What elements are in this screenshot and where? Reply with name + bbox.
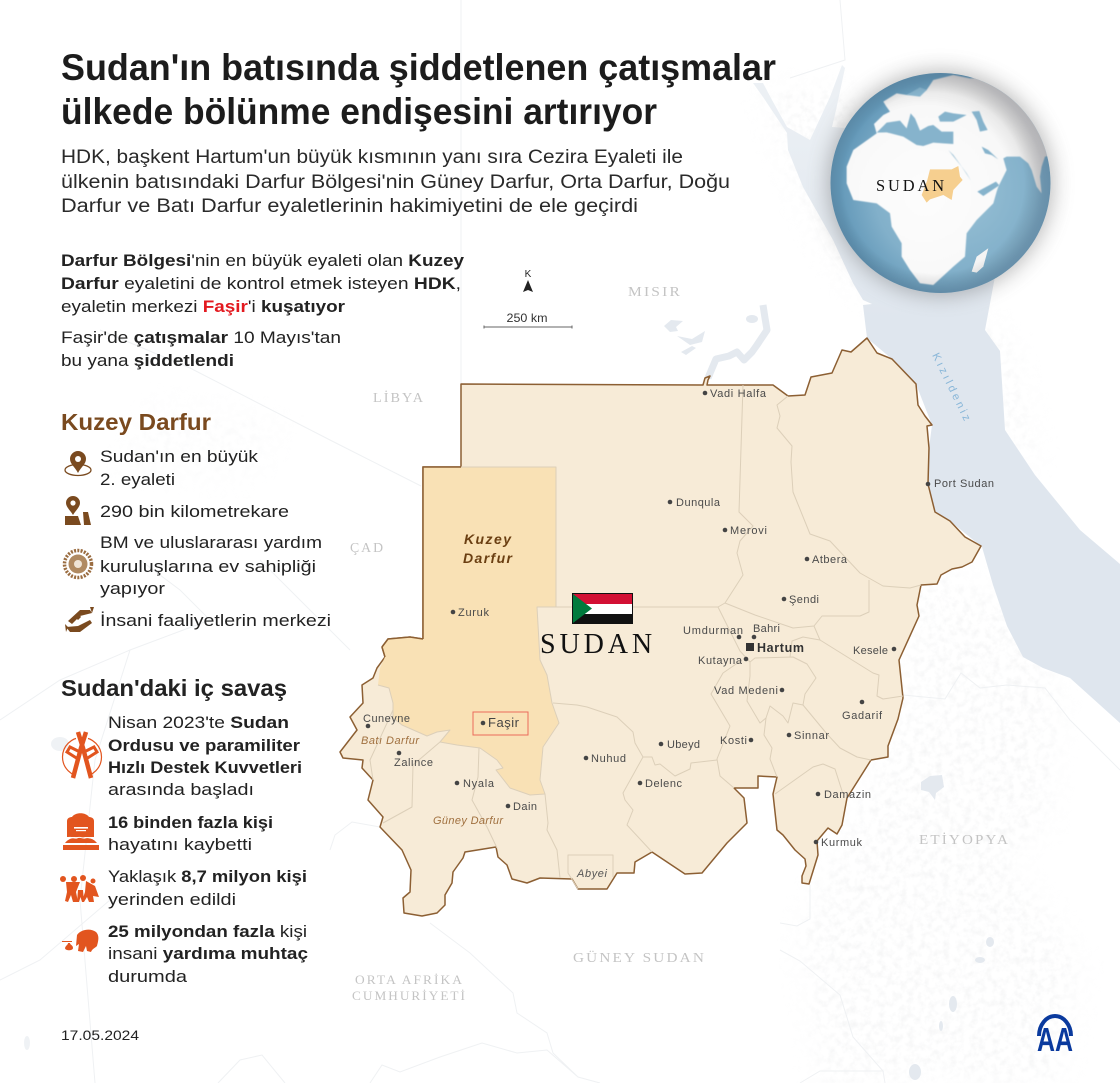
fact: UN host: kuruluşlarına ev sahipliği: [100, 557, 316, 576]
neighbouring country labels: MISIR: [628, 285, 682, 300]
city labels and markers: Hartum: [757, 641, 804, 655]
neighbouring country labels: [350, 285, 1010, 1003]
flag of Sudan: [572, 593, 633, 624]
icon: pin on ellipse: [65, 451, 91, 476]
fact: aid need: [108, 922, 308, 986]
fact: displaced: yerinden edildi: [108, 890, 236, 909]
city labels and markers: Dain: [513, 801, 537, 813]
icon: people in need: [62, 930, 98, 952]
north arrow and scale bar: K: [525, 269, 532, 280]
water: Lake Nasser and Toshka: [664, 305, 767, 378]
fact: displaced: [108, 867, 307, 909]
city labels and markers: Merovi: [730, 525, 767, 537]
state labels: Abyei: [576, 868, 608, 880]
title: [61, 47, 776, 132]
globe: Sudan highlight: [922, 166, 963, 203]
icon: crossed rifles: [62, 728, 102, 781]
city labels and markers: Kutayna: [698, 655, 743, 667]
water: Red Sea and Gulfs: [753, 65, 1120, 723]
fact: aid need: durumda: [108, 967, 188, 986]
globe: [825, 70, 1055, 300]
city labels and markers: Zuruk: [458, 607, 490, 619]
fact: start of war: Hızlı Destek Kuvvetleri: [108, 758, 302, 777]
globe land: [847, 72, 1053, 285]
city labels and markers: Vad Medeni: [714, 685, 778, 697]
city labels and markers: Nuhud: [591, 753, 626, 765]
fact: second largest: Sudan'ın en büyük: [100, 447, 259, 466]
title: ülkede bölünme endişesini artırıyor: [61, 91, 657, 132]
heading: Kuzey Darfur: Kuzey Darfur: [61, 409, 211, 435]
state labels: [361, 531, 608, 880]
neighbouring country labels: LİBYA: [373, 390, 425, 406]
state labels: Batı Darfur: [361, 735, 420, 747]
north arrow and scale bar: 250 km: [506, 311, 548, 325]
fact: aid need: 25 milyondan fazla kişi: [108, 922, 307, 941]
intro paragraph: eyaletin merkezi Faşir 'i kuşatıyor: [61, 297, 345, 316]
city labels and markers: Kesele: [853, 645, 888, 657]
city labels and markers: Dunqula: [676, 497, 721, 509]
fact: deaths: 16 binden fazla kişi: [108, 813, 273, 832]
fact: UN host: yapıyor: [100, 579, 165, 598]
icon: pin and road: [65, 496, 91, 525]
city labels and markers: Umdurman: [683, 625, 743, 637]
city labels and markers: Şendi: [789, 594, 819, 606]
city labels and markers: Port Sudan: [934, 478, 994, 490]
neighbouring country labels: ETİYOPYA: [919, 832, 1010, 848]
city labels and markers: Zalince: [394, 757, 433, 769]
intro paragraph: [61, 251, 465, 370]
city labels and markers: Nyala: [463, 778, 495, 790]
city labels and markers: Cuneyne: [363, 713, 410, 725]
heading: Sudan'daki iç savaş: Sudan'daki iç savaş: [61, 675, 287, 701]
callout: Faşir: [473, 712, 528, 735]
fact: displaced: Yaklaşık 8,7 milyon kişi: [108, 867, 307, 886]
fact: deaths: hayatını kaybetti: [108, 835, 252, 854]
title: Sudan'ın batısında şiddetlenen çatışmalar: [61, 47, 776, 88]
fact: UN host: [100, 533, 322, 598]
subtitle: ülkenin batısındaki Darfur Bölgesi'nin Güney Darfur, Orta Darfur, Doğu: [61, 172, 730, 193]
panel: Kuzey Darfur facts: [61, 409, 331, 632]
city labels and markers: Damazin: [824, 789, 871, 801]
city labels and markers: Delenc: [645, 778, 682, 790]
water: lakes: [24, 737, 994, 1080]
state labels: Kuzey: [464, 531, 512, 547]
city labels and markers: Atbera: [812, 554, 848, 566]
icon: displaced people: [60, 875, 99, 902]
Abyei area: [568, 855, 613, 889]
neighbouring country labels: CUMHURİYETİ: [352, 988, 467, 1003]
logo: AA: AA: [1037, 1021, 1073, 1058]
callout: Faşir: Faşir: [488, 715, 520, 730]
subtitle: HDK, başkent Hartum'un büyük kısmının yanı sıra Cezira Eyaleti ile: [61, 147, 683, 168]
city labels and markers: Ubeyd: [667, 739, 700, 751]
city labels and markers: Bahri: [753, 623, 780, 635]
fact: deaths: [108, 813, 273, 854]
city labels and markers: Kurmuk: [821, 837, 862, 849]
city labels and markers: Vadi Halfa: [710, 388, 767, 400]
Kuzey Darfur state: [378, 467, 559, 795]
state labels: Güney Darfur: [433, 815, 504, 827]
globe label: SUDAN: [876, 176, 947, 195]
fact: UN host: BM ve uluslararası yardım: [100, 533, 322, 552]
neighbouring country labels: ORTA AFRİKA: [355, 972, 464, 987]
intro paragraph: Faşir'de çatışmalar 10 Mayıs'tan: [61, 328, 341, 347]
icon: helping hands: [65, 607, 94, 632]
date: 17.05.2024: [61, 1027, 139, 1043]
north arrow and scale bar: [484, 269, 572, 328]
intro paragraph: bu yana şiddetlendi: [61, 351, 234, 370]
icon: UN emblem: [64, 550, 92, 578]
neighbouring country labels: GÜNEY SUDAN: [573, 949, 706, 966]
neighbouring country labels: ÇAD: [350, 541, 385, 556]
fact: second largest: [100, 447, 259, 489]
Sudan territory: [340, 338, 981, 916]
fact: start of war: Ordusu ve paramiliter: [108, 736, 300, 755]
fact: humanitarian centre: İnsani faaliyetlerin merkezi: [100, 611, 331, 630]
neighbouring country labels: Kızıldeniz: [929, 351, 973, 423]
city labels and markers: Kosti: [720, 735, 747, 747]
icon: grave: [63, 813, 99, 850]
city labels and markers: Sinnar: [794, 730, 829, 742]
fact: area: 290 bin kilometrekare: [100, 502, 289, 521]
country label: SUDAN: SUDAN: [540, 628, 656, 660]
panel: civil war facts: [60, 675, 308, 986]
map: Sudan: [340, 338, 981, 916]
fact: second largest: 2. eyaleti: [100, 470, 175, 489]
fact: start of war: Nisan 2023'te Sudan: [108, 713, 289, 732]
fact: aid need: insani yardıma muhtaç: [108, 944, 308, 963]
subtitle: [61, 147, 730, 217]
intro paragraph: Darfur eyaletini de kontrol etmek isteyen HDK ,: [61, 274, 461, 293]
city labels and markers: Gadarif: [842, 710, 883, 722]
state labels: Darfur: [463, 550, 514, 566]
fact: start of war: [108, 713, 302, 799]
fact: start of war: arasında başladı: [108, 780, 254, 799]
intro paragraph: Darfur Bölgesi 'nin en büyük eyaleti olan Kuzey: [61, 251, 465, 270]
subtitle: Darfur ve Batı Darfur eyaletlerinin hakimiyetini de ele geçirdi: [61, 196, 638, 217]
city labels and markers: [363, 388, 994, 849]
logo: AA: [1037, 1016, 1073, 1058]
